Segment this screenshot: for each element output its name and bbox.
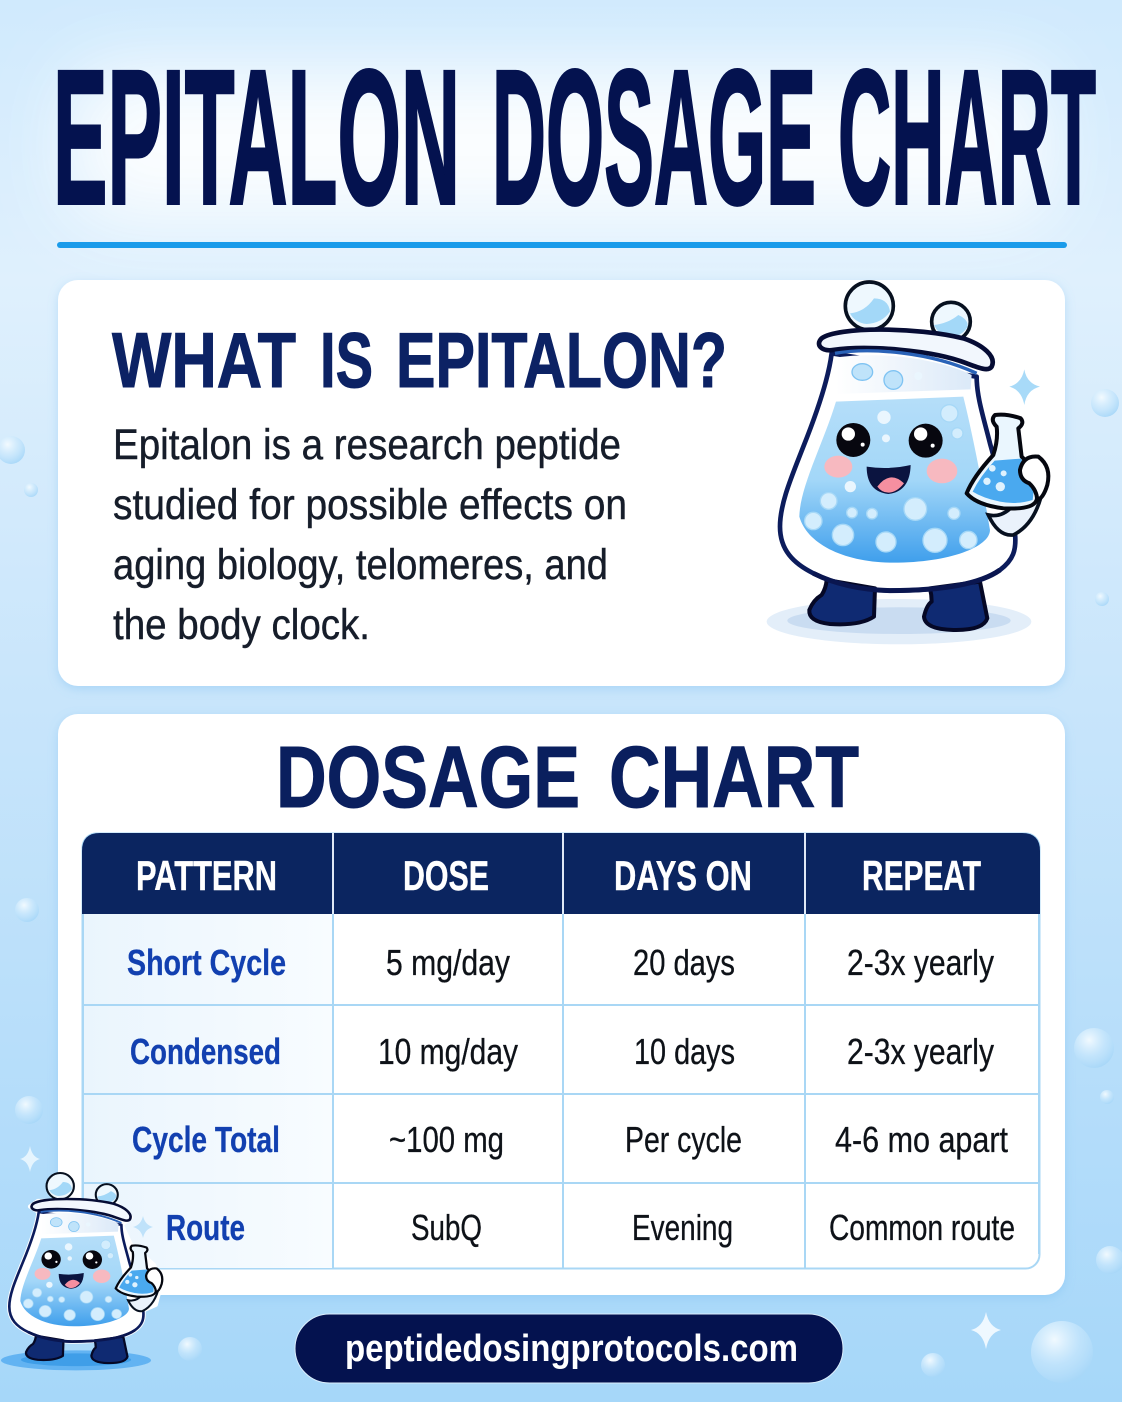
heading: what is epitalon: WHAT [112,316,296,404]
icon: sparkle beside route [133,1216,153,1238]
row: short cycle: 2-3x yearly [847,942,994,983]
row: route: SubQ [411,1207,482,1248]
icon: sparkle bottom left [20,1146,40,1172]
row: cycle total: Cycle Total [132,1119,280,1160]
panel: dosage chart [58,714,1065,1295]
heading: what is epitalon: EPITALON? [396,316,727,404]
table header: PATTERN [136,852,277,899]
description text [113,421,627,649]
heading: what is epitalon: IS [320,316,373,404]
row: short cycle: 20 days [633,942,735,983]
website pill [295,1314,843,1383]
title glow [70,70,1050,220]
heading: dosage chart: CHART [609,729,859,826]
row: cycle total [132,1119,1008,1160]
description text: Epitalon is a research peptide [113,421,621,469]
description text: the body clock. [113,601,370,649]
small mascot [1,1173,162,1370]
row: short cycle: 5 mg/day [386,942,510,983]
decorative bubbles [0,389,1122,1383]
row: condensed: 10 mg/day [378,1031,518,1072]
title rule [57,242,1067,248]
mascot: flask character [767,282,1048,644]
panel: what is epitalon [58,280,1065,686]
table [82,833,1040,1268]
row: route: Evening [632,1207,733,1248]
table header: REPEAT [862,852,981,899]
title: EPITALON [53,30,460,244]
row: condensed: Condensed [130,1031,281,1072]
row: route: Common route [829,1207,1015,1248]
row: short cycle [127,942,994,983]
row: condensed [130,1031,994,1072]
row: condensed: 2-3x yearly [847,1031,994,1072]
heading: dosage chart: DOSAGE [276,729,580,826]
row: cycle total: Per cycle [625,1119,742,1160]
row: cycle total: ~100 mg [389,1119,504,1160]
table header: DOSE [403,852,489,899]
icon: sparkle bottom right [971,1312,1001,1349]
row: route: Route [166,1207,245,1248]
row: short cycle: Short Cycle [127,942,286,983]
website pill: peptidedosingprotocols.com [345,1328,798,1370]
heading: dosage chart [276,729,859,826]
description text: aging biology, telomeres, and [113,541,608,589]
table header [82,833,1040,914]
row: route [166,1207,1015,1248]
description text: studied for possible effects on [113,481,627,529]
row: cycle total: 4-6 mo apart [835,1119,1008,1160]
row: condensed: 10 days [634,1031,735,1072]
heading: what is epitalon [112,316,727,404]
table header: DAYS ON [614,852,752,899]
